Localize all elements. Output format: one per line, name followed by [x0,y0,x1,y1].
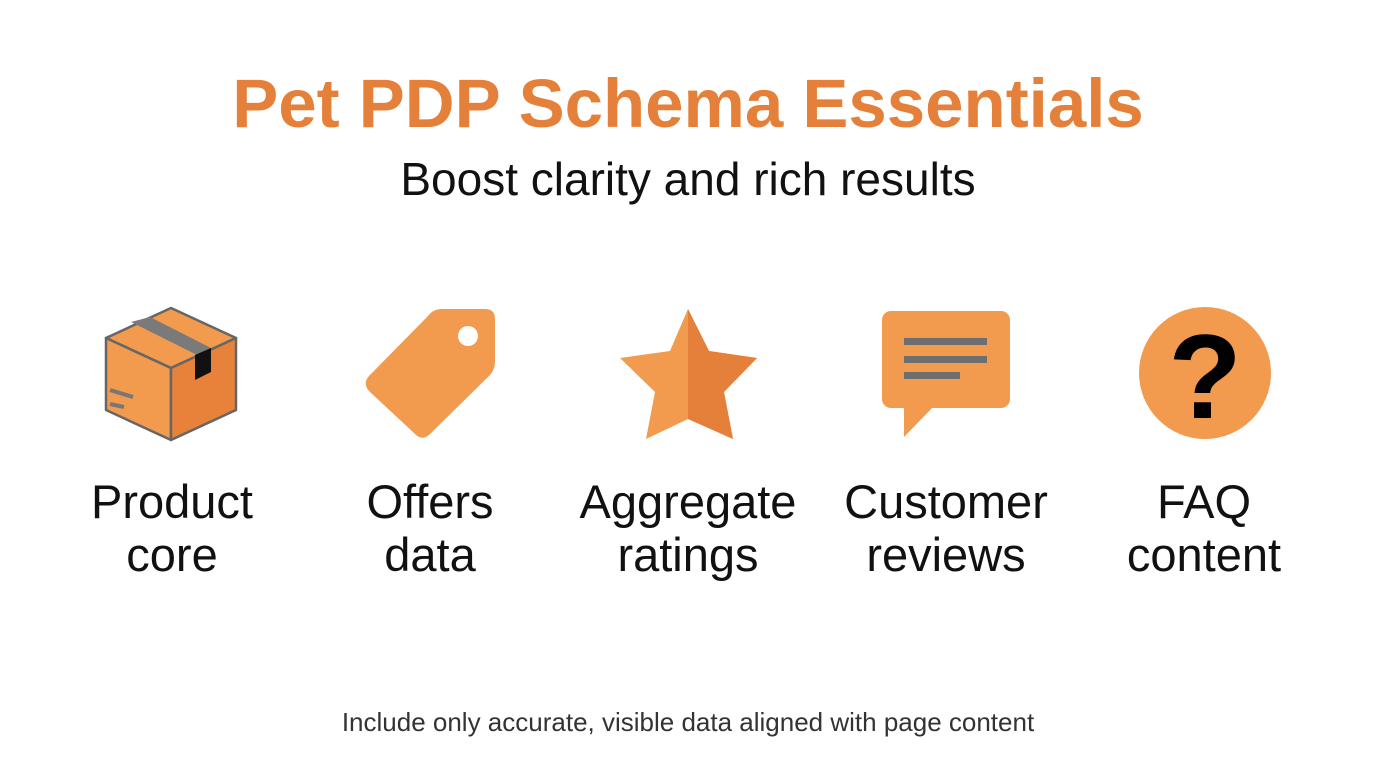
label: aggregate ratings: ratings [617,528,759,581]
label: customer reviews: Customer [844,475,1048,528]
icon: box [106,308,236,440]
label: product core: core [126,528,218,581]
icon: speech bubble [882,311,1010,437]
label: offers data: data [384,528,476,581]
label: product core [91,475,253,581]
label: aggregate ratings [580,475,796,581]
icon: question circle: ? [1168,310,1242,444]
label: faq content: content [1127,528,1281,581]
label: product core: Product [91,475,253,528]
icon: star [620,309,757,439]
subtitle: Boost clarity and rich results [400,153,976,205]
label: aggregate ratings: Aggregate [580,475,796,528]
label: faq content [1127,475,1281,581]
label: customer reviews: reviews [866,528,1026,581]
title: Pet PDP Schema Essentials [232,65,1144,142]
icon: question circle [1139,307,1271,444]
label: offers data: Offers [366,475,494,528]
label: offers data [366,475,494,581]
footer note: Include only accurate, visible data aligned with page content [342,707,1034,737]
icon: tag [366,309,495,438]
label: faq content: FAQ [1157,475,1251,528]
label: customer reviews [844,475,1048,581]
